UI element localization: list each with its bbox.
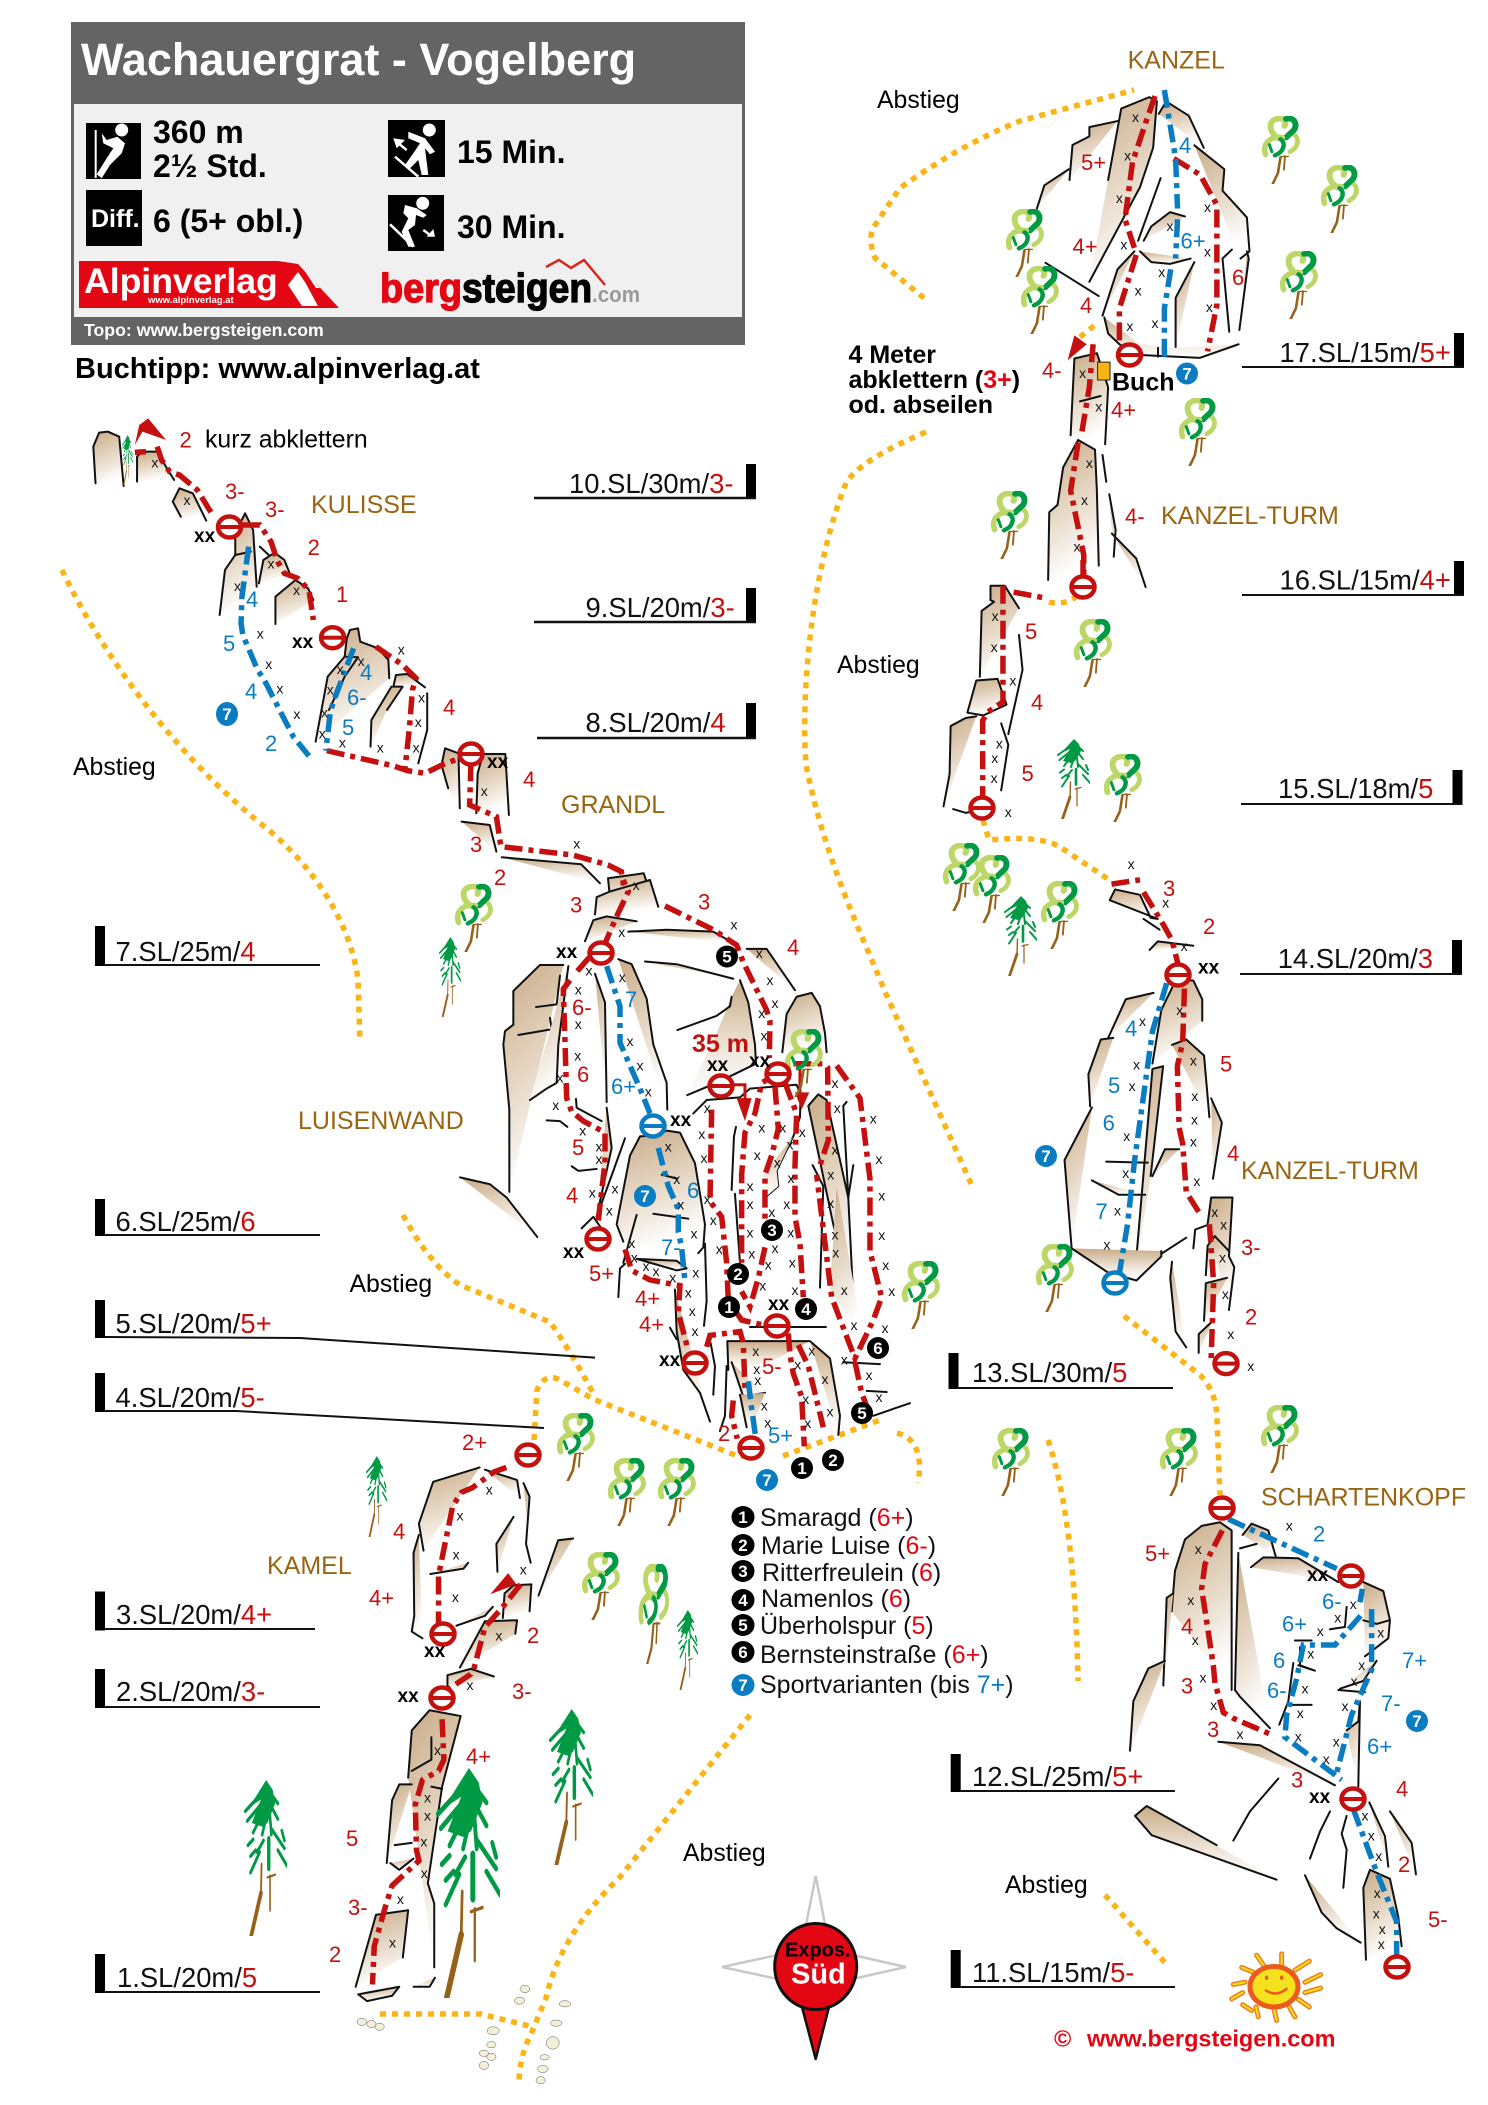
grades: blue: 7- [661, 1235, 681, 1260]
grades: red: 2+ [462, 1430, 487, 1455]
belay marks: xx: xx [1198, 958, 1220, 979]
grades: blue: 7- [1381, 1691, 1401, 1716]
grades: red: 4 [1080, 293, 1092, 318]
grades: red: 3 [570, 892, 582, 918]
bolts: small x marks: xxxxxxxxxx [628, 1197, 699, 1319]
route number markers on topo: 2 [733, 1265, 743, 1284]
icon: sun [1232, 1954, 1321, 2020]
pitch labels: right side: 16.SL/15m/4+ [1280, 564, 1451, 596]
bolts: small x marks: xxxxxxxxxx [1103, 1204, 1293, 1608]
grades: red: 3 [1181, 1674, 1193, 1699]
bolts: small x marks: xxxxxxxxxx [792, 1075, 858, 1333]
belay marks: xx: xx [556, 942, 578, 963]
belay marks: xx: xx [424, 1641, 446, 1662]
pitch labels: right side: 13.SL/30m/5 [972, 1357, 1127, 1388]
grades: red: 3 [1163, 876, 1175, 901]
grades: red: 5+ [589, 1261, 614, 1286]
route number markers on topo: 5 [722, 948, 732, 966]
difficulty value: 6 (5+ obl.) [153, 203, 303, 239]
grades: red: 4 [443, 695, 455, 720]
grades: blue: 7+ [1402, 1648, 1427, 1673]
pitch labels: right side: 12.SL/25m/5+ [972, 1761, 1143, 1792]
pitch labels: left side: 7.SL/25m/4 [116, 936, 256, 967]
logo: Alpinverlag: www.alpinverlag.at [147, 295, 235, 306]
descent time: 30 Min. [457, 209, 565, 245]
bolts: small x marks: xxxxxxxxxx [575, 916, 778, 1043]
legend: route names: Sportvarianten (bis 7+) [760, 1671, 1014, 1699]
route number markers on topo: 7 [1182, 364, 1192, 384]
icon: climber [86, 123, 141, 179]
route number markers on topo: 4 [801, 1300, 811, 1319]
bolts: small x marks: xxxxxxxxxx [452, 1481, 1386, 1952]
grades: blue: 6 [687, 1178, 699, 1203]
copyright: © [1054, 2026, 1071, 2052]
deciduous trees [458, 118, 1356, 1664]
belay stations [218, 344, 1408, 1978]
legend: route names: Namenlos (6) [761, 1585, 911, 1613]
legend: route names: Ritterfreulein (6) [762, 1559, 941, 1587]
grades: red: 6 [1232, 265, 1244, 290]
grades: red: 4+ [1111, 398, 1136, 422]
pitch labels: left side [95, 926, 595, 1993]
route number markers on topo: 1 [724, 1298, 734, 1317]
grades: blue: 4 [360, 660, 372, 685]
grades: red: 2 [308, 535, 320, 560]
belay marks: xx: xx [707, 1055, 729, 1076]
grades: red: 1 [336, 582, 348, 607]
grades: blue: 5 [223, 631, 235, 656]
pine trees [122, 435, 1090, 1998]
logo: bergsteigen [380, 260, 640, 311]
bolts: small x marks: xxxxxxxxxx [1295, 1673, 1382, 1864]
grades: blue: 6+ [1367, 1734, 1392, 1759]
route number markers on topo: 3 [767, 1221, 777, 1240]
copyright: www.bergsteigen.com [1086, 2026, 1336, 2052]
bolts: small x marks: xxxxxxxxxx [319, 653, 425, 756]
grades: red: 4+ [1072, 234, 1098, 259]
bolts: small x marks: xxxxxxxxxx [151, 454, 405, 722]
book tip: Buchtipp: www.alpinverlag.at [75, 353, 480, 385]
grades: red: 2 [1203, 914, 1215, 939]
grades: blue: 6+ [1282, 1612, 1307, 1636]
icon: ascent hiker [388, 120, 445, 177]
title: Wachauergrat - Vogelberg [81, 34, 636, 85]
route time: 2½ Std. [153, 148, 267, 184]
legend: route names: 6 [738, 1643, 748, 1662]
belay marks: xx: xx [1309, 1787, 1331, 1808]
topo credit: Topo: www.bergsteigen.com [84, 320, 324, 340]
belay marks: xx: xx [398, 1686, 419, 1707]
legend: route names: 2 [738, 1536, 748, 1555]
legend: route names: Bernsteinstraße (6+) [760, 1641, 989, 1669]
pitch labels: right side: 15.SL/18m/5 [1278, 773, 1433, 804]
rocks and routes: Kanzel-Turm [944, 560, 1234, 1358]
area names: KANZEL [1128, 47, 1225, 75]
bolts: small x marks: xxxxxxxxxx [552, 1016, 711, 1154]
belay marks: xx: xx [749, 1051, 771, 1072]
pitch labels: left side: 1.SL/20m/5 [117, 1962, 257, 1993]
grades: red: 2 [527, 1623, 539, 1648]
grades: red: 4 [393, 1519, 405, 1544]
icon: difficulty [86, 190, 142, 246]
legend: route names: Marie Luise (6-) [761, 1532, 936, 1560]
route number markers on topo: 5 [857, 1404, 867, 1423]
rocks and routes: Schartenkopf [1130, 1519, 1416, 1960]
route number markers on topo: 7 [762, 1471, 772, 1490]
bolts: small x marks [151, 109, 1386, 1952]
route number markers on topo: 1 [797, 1459, 807, 1478]
grades: blue: 5 [342, 715, 354, 740]
grades: red: 5 [1022, 761, 1034, 786]
grades: red: 3 [698, 890, 710, 914]
grades: red: 4 [1031, 690, 1043, 715]
grades: blue [223, 133, 1427, 1759]
belay marks: xx: xx [670, 1110, 692, 1131]
grades: blue: 2 [265, 731, 277, 756]
icon: difficulty: Diff. [91, 205, 140, 233]
grades: red: 2 [718, 1421, 730, 1446]
grades: red: 2 [329, 1942, 341, 1967]
grades: red: 2 [180, 428, 192, 453]
logo: Alpinverlag [79, 261, 339, 308]
pitch labels: right side: 17.SL/15m/5+ [1280, 337, 1451, 368]
note: down-climb [848, 341, 1020, 419]
bolts: small x marks: xxxxxxxxxx [991, 673, 1188, 1029]
grades: red: 5+ [1081, 150, 1106, 175]
pitch labels: left side: 2.SL/20m/3- [116, 1676, 265, 1707]
pitch labels: centre top [534, 464, 756, 738]
grades: red: 6 [577, 1062, 589, 1087]
belay marks: xx: xx [194, 526, 216, 547]
bolts: small x marks: xxxxxxxxxx [804, 109, 1174, 1431]
grades: blue: 6+ [1180, 228, 1206, 254]
logo: bergsteigen: steigen [462, 265, 592, 311]
logo: bergsteigen: berg [380, 265, 462, 311]
compass: exposition south: Expos. [785, 1940, 851, 1962]
note: down-climb: abklettern (3+) [848, 366, 1020, 394]
approach time: 15 Min. [457, 134, 565, 170]
bolts: small x marks: xxxxxxxxxx [692, 1119, 806, 1339]
grades: blue: 4 [1179, 133, 1191, 158]
descent labels [73, 87, 1088, 1899]
grades: red: 2 [1245, 1304, 1257, 1330]
descent labels: Abstieg [350, 1271, 432, 1298]
legend: route names: Überholspur (5) [760, 1612, 934, 1640]
belay marks: xx: xx [563, 1242, 585, 1263]
grades: red: 3- [225, 479, 245, 504]
route number markers on topo: 2 [828, 1451, 838, 1470]
grades: red: 4+ [639, 1312, 664, 1337]
area names: KANZEL-TURM [1241, 1157, 1419, 1185]
bolts: small x marks: xxxxxxxxxx [841, 1110, 895, 1405]
grades: red: 4+ [466, 1744, 491, 1769]
logo: bergsteigen: .com [592, 282, 640, 307]
grades: blue: 6+ [611, 1074, 636, 1099]
grades: blue: 7 [1096, 1199, 1108, 1224]
pitch labels: left side: 3.SL/20m/4+ [116, 1599, 272, 1630]
grades: blue: 4 [245, 679, 257, 704]
route number markers on topo: 6 [873, 1339, 883, 1358]
bolts: small x marks: xxxxxxxxxx [1192, 1596, 1384, 1742]
belay marks: xx [194, 526, 1331, 1808]
bolts: small x marks: xxx [481, 783, 640, 893]
logbook marker [1098, 362, 1110, 380]
bolts: small x marks: xxxxxxxx [389, 1677, 474, 1950]
belay marks: xx: xx [659, 1350, 681, 1371]
bolts: small x marks: xxxxxxxxxx [1114, 1052, 1200, 1218]
belay marks: xx: xx [487, 752, 509, 773]
grades: red: 3- [1241, 1235, 1261, 1260]
pitch labels: right side: 11.SL/15m/5- [972, 1957, 1134, 1988]
grades: blue: 6 [1103, 1110, 1115, 1136]
grades: blue: 6- [347, 685, 367, 710]
grades: red: 5- [1428, 1907, 1448, 1932]
grades: red: 4+ [369, 1586, 394, 1610]
grades: red: 4- [1125, 504, 1145, 529]
area names: GRANDL [561, 791, 665, 819]
grades: red: 2 [494, 865, 506, 890]
rocks and routes: Kamel [356, 1467, 573, 2084]
grades: red: 4- [1042, 358, 1062, 383]
bolts: small x marks: xxxxxxxxxx [991, 199, 1213, 655]
route number markers on topo: 7 [640, 1187, 650, 1206]
pitch labels: left side: 4.SL/20m/5- [116, 1382, 265, 1413]
grades: red: 4+ [635, 1286, 660, 1311]
grades: red [180, 150, 1448, 1967]
route length: 360 m [153, 114, 244, 150]
grades: red: 5 [1220, 1052, 1232, 1077]
belay marks: xx: xx [768, 1294, 790, 1315]
grades: red: 3 [470, 832, 482, 857]
area names: SCHARTENKOPF [1261, 1484, 1466, 1512]
route number markers on topo: 7 [1412, 1712, 1422, 1731]
grades: blue: 4 [246, 587, 258, 612]
pitch labels: centre top: 10.SL/30m/3- [569, 468, 733, 499]
legend: route names [732, 1504, 1014, 1699]
grades: blue: 4 [1125, 1016, 1137, 1041]
belay marks: xx: xx [292, 632, 314, 653]
grades: red: 4 [1227, 1141, 1239, 1166]
grades: red: 3- [265, 497, 285, 522]
grades: blue: 2 [1313, 1522, 1325, 1547]
area names: KANZEL-TURM [1161, 502, 1339, 530]
legend: route names: 4 [738, 1591, 748, 1610]
area names: LUISENWAND [298, 1107, 464, 1135]
grades: red: 3 [1291, 1768, 1303, 1792]
grades: blue: 6 [1273, 1648, 1285, 1673]
compass: exposition south: Süd [791, 1959, 846, 1991]
descent paths (Abstieg) [62, 90, 1220, 2081]
bolts: small x marks: xxxxxxxxxx [746, 1196, 796, 1293]
note: down-climb: od. abseilen [848, 391, 993, 419]
grades: red: 5 [1025, 619, 1037, 644]
descent labels: Abstieg [837, 652, 920, 679]
note: down-climb: 4 Meter [848, 341, 936, 369]
pitch labels: right side: 14.SL/20m/3 [1278, 943, 1433, 974]
grades: red: 4 [566, 1183, 578, 1208]
bolts: small x marks: xxxxxxxxxx [589, 1126, 717, 1228]
note: 35 m: 35 m [692, 1030, 749, 1058]
pitch labels: left side: 6.SL/25m/6 [116, 1206, 256, 1237]
grades: red: 5 [346, 1826, 358, 1851]
panel: title box [71, 22, 745, 345]
grades: red: 4 [523, 767, 535, 792]
note: kurz abklettern: kurz abklettern [205, 427, 368, 454]
grades: red: 5+ [1145, 1541, 1170, 1566]
grades: red: 4 [787, 935, 799, 960]
grades: blue: 5 [1108, 1073, 1120, 1098]
legend: route names: 7 [738, 1676, 748, 1695]
legend: route names: 3 [738, 1562, 748, 1581]
grades: red: 5- [762, 1354, 782, 1379]
legend: route names: Smaragd (6+) [760, 1504, 914, 1532]
legend: route names: 1 [738, 1508, 748, 1527]
logo: Alpinverlag: Alpinverlag [84, 261, 278, 301]
grades: red: 3- [348, 1895, 368, 1920]
rocks and routes: Kulisse and Grandl [93, 418, 653, 900]
grades: blue: 6- [1267, 1678, 1287, 1703]
pitch labels: right side [948, 333, 1464, 1988]
area names [267, 47, 1466, 1580]
pitch labels: centre top: 8.SL/20m/4 [586, 707, 726, 738]
grades: red: 3- [512, 1679, 532, 1704]
grades: blue: 5+ [768, 1423, 793, 1448]
route number markers on topo: 7 [222, 705, 232, 724]
grades: red: 3 [1207, 1717, 1219, 1742]
grades: red: 2 [1398, 1852, 1410, 1877]
bolts: small x marks: xxxxxxxxxx [752, 1342, 834, 1431]
legend: route names: 5 [738, 1616, 748, 1635]
grades: red: 5 [572, 1135, 584, 1160]
grades: blue: 7 [625, 987, 637, 1012]
area names: KULISSE [311, 491, 417, 519]
rocks and routes: Kanzel [1037, 90, 1250, 587]
descent labels: Abstieg [73, 754, 156, 781]
descent labels: Abstieg [1005, 1872, 1088, 1899]
compass: exposition south [722, 1876, 906, 2059]
route number markers on topo: 7 [1041, 1147, 1051, 1166]
pitch labels: centre top: 9.SL/20m/3- [586, 592, 735, 623]
grades: blue: 6- [1322, 1589, 1342, 1614]
area names: KAMEL [267, 1552, 352, 1580]
descent labels: Abstieg [877, 87, 960, 114]
belay marks: xx: xx [1307, 1565, 1329, 1586]
stones [357, 1985, 571, 2084]
pitch labels: left side: 5.SL/20m/5+ [116, 1308, 272, 1339]
grades: red: 4 [1181, 1614, 1193, 1639]
grades: red: 6- [572, 995, 592, 1020]
descent labels: Abstieg [683, 1840, 766, 1867]
rocks and routes: Luisenwand and Grandl wall [460, 880, 910, 1446]
icon: descent hiker [388, 195, 444, 251]
note: summit book: Buch [1112, 369, 1174, 397]
route number markers on topo [216, 362, 1428, 1732]
grades: red: 4 [1396, 1776, 1408, 1802]
